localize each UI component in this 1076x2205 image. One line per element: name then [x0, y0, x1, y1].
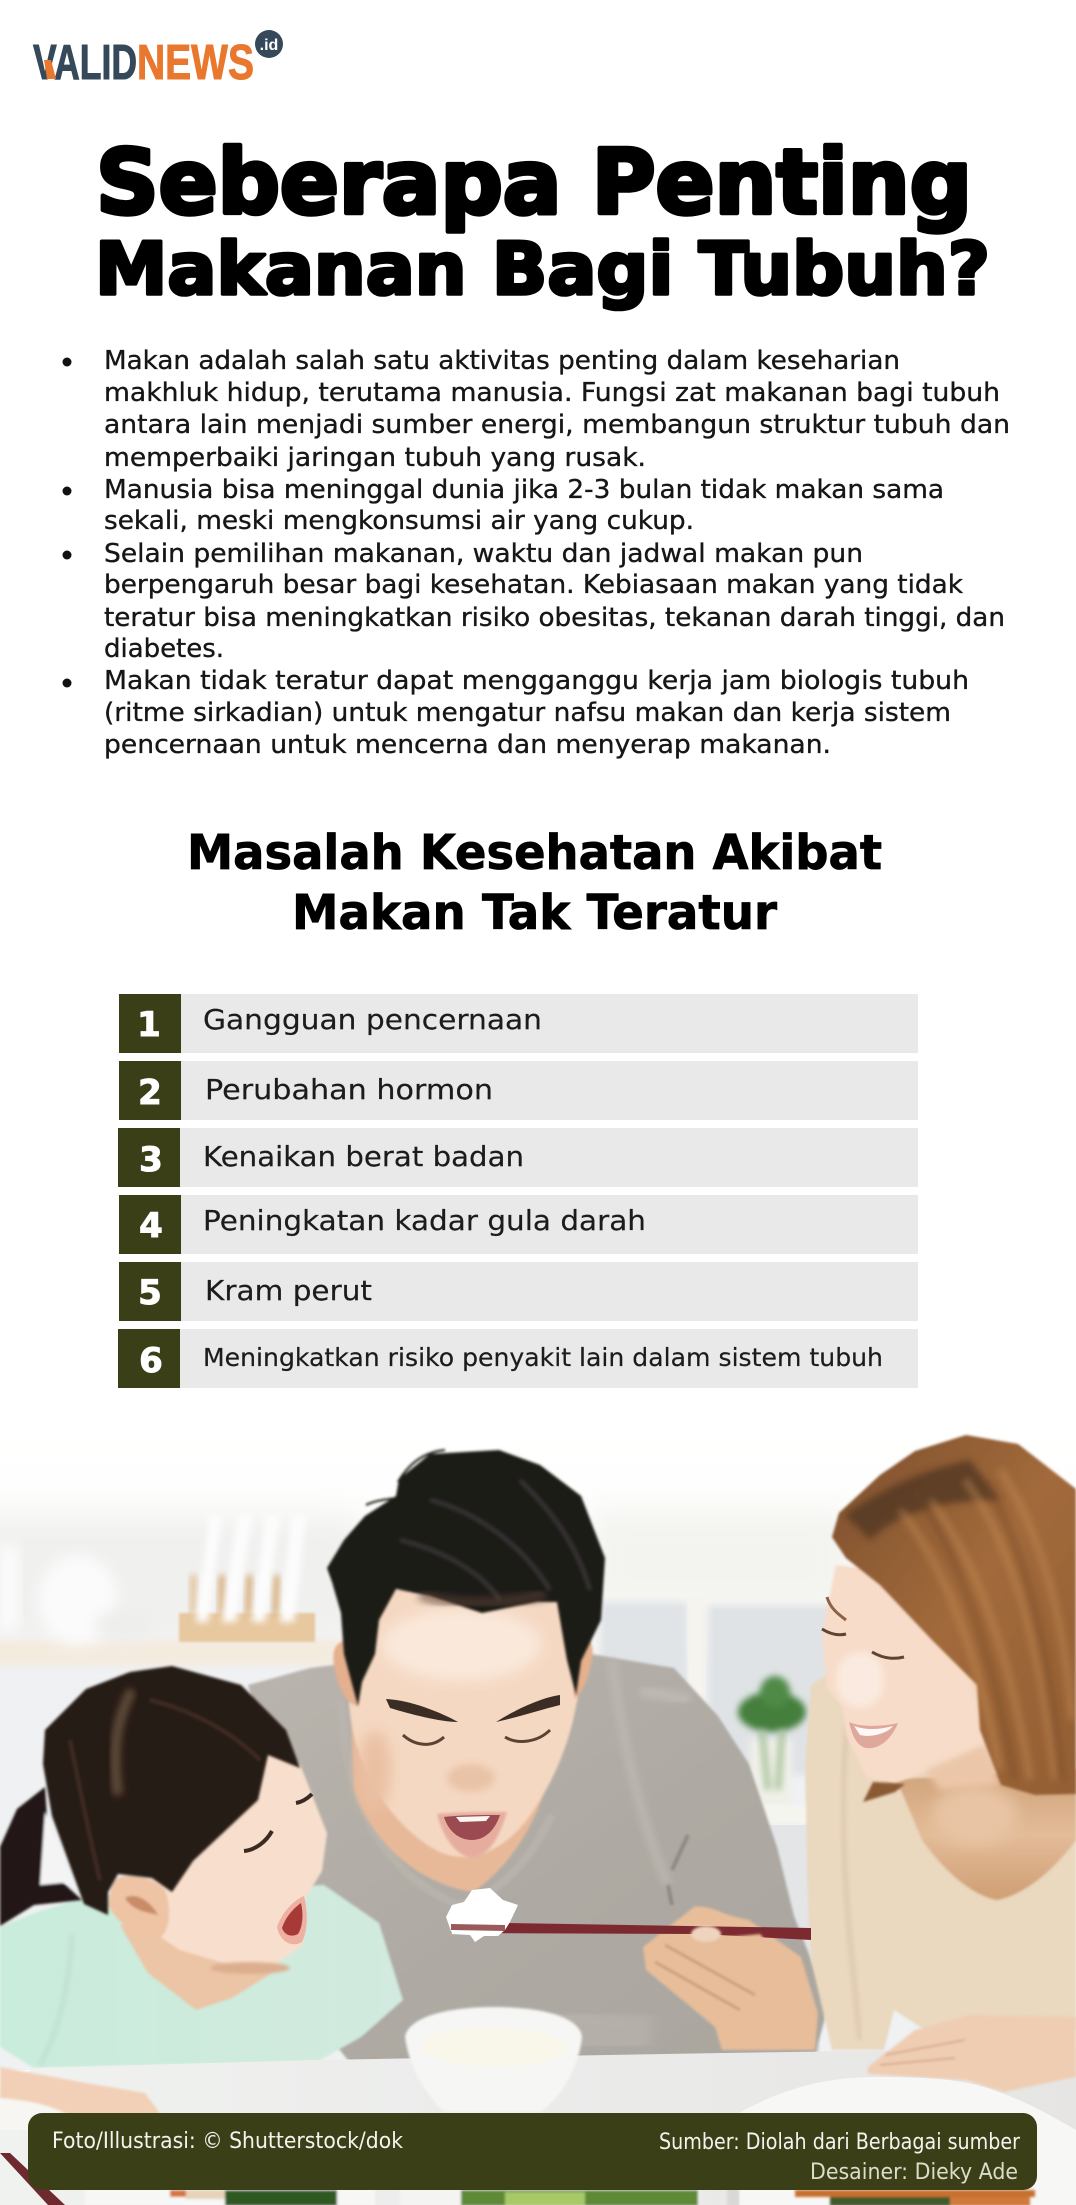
woman: hair	[832, 1435, 1076, 1802]
bullet list: intro text: berpengaruh besar bagi kesehatan. Kebiasaan makan yang tidak	[104, 570, 963, 600]
bullet list: intro text: (ritme sirkadian) untuk mengatur nafsu makan dan kerja sistem	[104, 698, 951, 728]
title	[95, 130, 990, 311]
row 1	[119, 994, 918, 1053]
bullet list: intro text: Makan adalah salah satu aktivitas penting dalam keseharian	[104, 346, 900, 376]
source credit: Sumber: Diolah dari Berbagai sumber	[659, 2130, 1021, 2155]
woman: facial features	[822, 1597, 904, 1748]
designer credit: Desainer: Dieky Ade	[810, 2160, 1018, 2185]
man: hand holding chopsticks	[643, 1907, 818, 2050]
numbered list	[118, 994, 918, 1388]
bullet list: intro text: makhluk hidup, terutama manusia. Fungsi zat makanan bagi tubuh	[104, 378, 1000, 408]
logo: Validnews.id: VALID	[33, 36, 137, 90]
photo credit: Foto/Illustrasi: © Shutterstock/dok	[52, 2129, 403, 2154]
section heading	[187, 825, 882, 941]
title: Seberapa Penting	[96, 130, 972, 234]
row 2: Perubahan hormon	[205, 1073, 493, 1106]
child: arm	[0, 2067, 162, 2116]
section heading: Makan Tak Teratur	[292, 885, 777, 941]
title: Makanan Bagi Tubuh?	[95, 227, 990, 311]
row 3	[118, 1128, 918, 1187]
child: neck, face, ear	[108, 1740, 327, 2010]
row 6: 6	[139, 1341, 163, 1381]
row 6: Meningkatkan risiko penyakit lain dalam sistem tubuh	[203, 1343, 883, 1372]
row 4	[119, 1195, 918, 1254]
section heading: Masalah Kesehatan Akibat	[187, 825, 882, 881]
child: ponytail	[0, 1787, 82, 1926]
woman: sweater	[805, 1660, 1076, 2050]
man: shirt	[248, 1654, 829, 2064]
row 1: 1	[137, 1005, 161, 1045]
row 5: Kram perut	[205, 1274, 372, 1307]
bullet list: intro text: antara lain menjadi sumber energi, membangun struktur tubuh dan	[104, 410, 1010, 440]
photo: family eating together	[0, 1420, 1076, 2205]
chopstick at lower left	[0, 2153, 65, 2205]
row 5	[119, 1262, 918, 1321]
row 5: 5	[138, 1273, 162, 1313]
child: shirt	[0, 1885, 403, 2068]
bullet list: intro text: Makan tidak teratur dapat mengganggu kerja jam biologis tubuh	[104, 666, 969, 696]
right plate	[739, 2077, 1076, 2205]
man: neck and face	[333, 1590, 593, 1892]
chopsticks	[451, 1922, 811, 1940]
background kitchen	[0, 1508, 920, 2070]
bullet list: intro text: Manusia bisa meninggal dunia jika 2-3 bulan tidak makan sama	[104, 475, 944, 505]
logo: Validnews.id: .id	[260, 37, 278, 54]
woman: hand	[868, 2015, 1076, 2092]
bullet list: intro text: diabetes.	[104, 634, 224, 664]
bullet list: intro text: teratur bisa meningkatkan risiko obesitas, tekanan darah tinggi, dan	[104, 603, 1005, 633]
child: hair	[43, 1666, 300, 1915]
rice bowl	[405, 2007, 582, 2112]
logo: Validnews.id: NEWS	[137, 36, 254, 90]
bullet list: intro text: pencernaan untuk mencerna dan menyerap makanan.	[104, 730, 831, 760]
row 4: 4	[139, 1206, 163, 1246]
man: hair	[327, 1450, 605, 1706]
bullet list: intro text	[62, 346, 1010, 760]
woman: neck and chest	[880, 1770, 1076, 1900]
bullet list: intro text: sekali, meski mengkonsumsi air yang cukup.	[104, 506, 694, 536]
table	[0, 2048, 1076, 2205]
row 3: 3	[139, 1140, 163, 1180]
row 1: Gangguan pencernaan	[203, 1003, 542, 1036]
row 3: Kenaikan berat badan	[203, 1140, 524, 1173]
child: facial features	[244, 1794, 312, 1944]
man: facial features	[386, 1695, 560, 1858]
row 6	[118, 1329, 918, 1388]
row 2	[119, 1061, 918, 1120]
logo: Validnews.id	[33, 30, 283, 90]
bullet list: intro text: memperbaiki jaringan tubuh yang rusak.	[104, 443, 646, 473]
row 2: 2	[138, 1073, 162, 1113]
man: fingertips over chopsticks	[689, 1906, 766, 1943]
row 4: Peningkatan kadar gula darah	[203, 1204, 646, 1237]
bullet list: intro text: Selain pemilihan makanan, waktu dan jadwal makan pun	[104, 539, 863, 569]
woman: face	[822, 1565, 1000, 1790]
footer bar	[28, 2113, 1037, 2190]
rice on chopsticks	[446, 1888, 518, 1942]
food below footer	[110, 2188, 1037, 2205]
